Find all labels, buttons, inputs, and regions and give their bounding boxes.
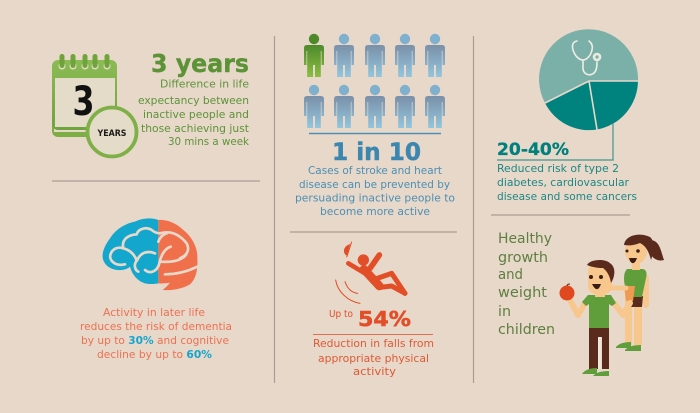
text block: healthy growth: Healthy <box>498 231 552 247</box>
icon: calendar: YEARS <box>97 129 126 139</box>
heading: up to 54%: 54% <box>358 307 411 331</box>
heading: up to 54%: Up to <box>329 309 353 320</box>
panel: healthy growth <box>498 231 664 376</box>
panel: dementia <box>80 218 232 361</box>
icon: brain <box>103 218 197 290</box>
text block: reduced risk: Reduced risk of type 2 <box>497 162 619 175</box>
text block: reduced risk: disease and some cancers <box>497 190 637 203</box>
text block: life expectancy: expectancy between <box>138 94 249 107</box>
text block: reduced risk <box>497 162 637 203</box>
text block: dementia risk <box>80 306 232 361</box>
text block: stroke and heart disease: persuading inactive people to <box>295 192 455 204</box>
panel: 20-40% <box>497 29 638 203</box>
text block: dementia risk: reduces the risk of dementia <box>80 320 232 333</box>
heading: 20-40%: 20-40% <box>497 140 569 160</box>
text block: stroke and heart disease <box>295 164 455 218</box>
icon: boy with apple <box>560 260 630 376</box>
icon: calendar <box>52 54 136 156</box>
panel: 3 years <box>52 49 250 156</box>
text block: healthy growth: and <box>498 267 523 283</box>
text block: life expectancy: inactive people and <box>143 108 249 121</box>
text block: dementia risk: Activity in later life <box>103 306 205 319</box>
text block: reduction in falls: appropriate physical <box>318 352 429 365</box>
icon: people row <box>304 34 445 128</box>
text block: healthy growth: weight <box>498 285 548 301</box>
text block: healthy growth <box>498 231 555 338</box>
chart: pie with stethoscope <box>539 29 638 130</box>
text block: stroke and heart disease: become more active <box>320 205 430 218</box>
text block: stroke and heart disease: Cases of stroke and heart <box>308 164 443 177</box>
text block: healthy growth: growth <box>498 250 548 266</box>
panel: falls <box>313 242 434 378</box>
icon: calendar: 3 <box>72 79 94 125</box>
text block: life expectancy <box>138 78 250 148</box>
text block: life expectancy: those achieving just <box>141 122 250 135</box>
icon: falling person <box>336 242 405 303</box>
text block: healthy growth: children <box>498 322 555 338</box>
icon: girl <box>616 235 664 351</box>
text block: dementia risk: by up to 30% and cognitive <box>81 334 229 347</box>
text block: life expectancy: Difference in life <box>160 78 249 90</box>
text block: reduction in falls <box>313 337 434 378</box>
panel: 1 in 10 <box>295 34 455 218</box>
heading: up to 54% <box>329 307 411 331</box>
heading: 3 years: 3 years <box>151 49 249 78</box>
heading: 1 in 10: 1 in 10 <box>332 138 421 166</box>
text block: life expectancy: 30 mins a week <box>168 135 250 148</box>
text block: reduction in falls: Reduction in falls from <box>313 337 434 350</box>
text block: reduced risk: diabetes, cardiovascular <box>497 176 629 189</box>
text block: dementia risk: decline by up to 60% <box>97 348 212 361</box>
text block: stroke and heart disease: disease can be prevented by <box>299 178 450 191</box>
text block: healthy growth: in <box>498 304 511 320</box>
text block: reduction in falls: activity <box>353 365 397 378</box>
